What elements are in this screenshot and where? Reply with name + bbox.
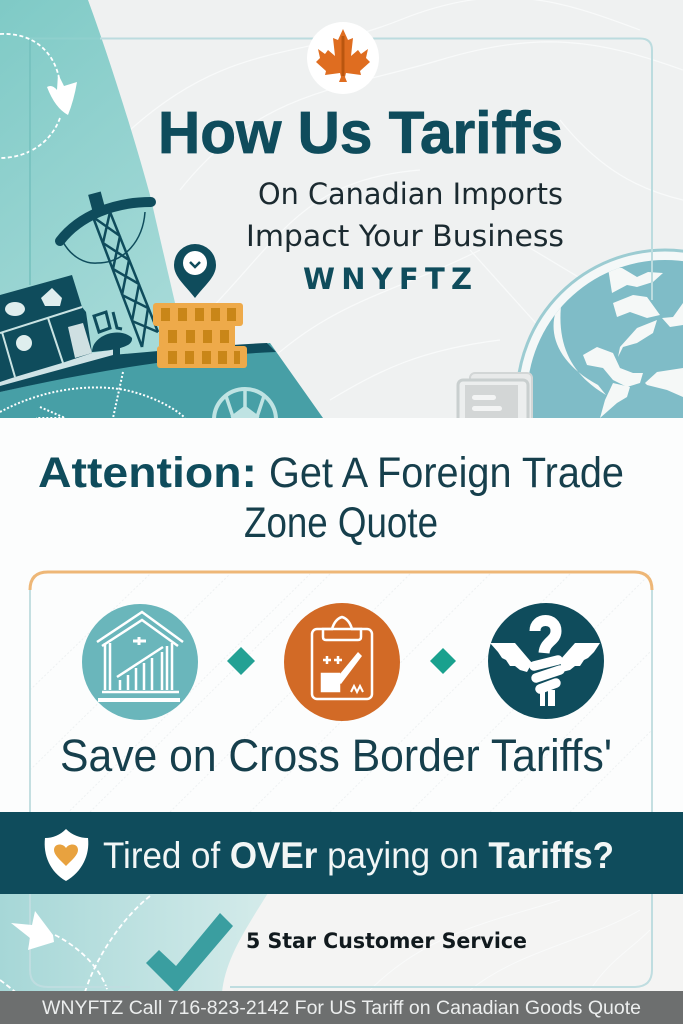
icon: white arrow <box>11 911 54 950</box>
band text: Tired of OVEr paying on Tariffs? <box>103 835 614 876</box>
dotted routes <box>0 387 185 418</box>
warehouse building <box>0 275 92 382</box>
icon: soccer-style globe <box>212 387 278 418</box>
bottom frame <box>30 893 652 987</box>
frame left edge <box>29 40 31 285</box>
icon: location pin <box>174 244 216 298</box>
bottom teal wedge <box>0 893 268 993</box>
ground light strip <box>0 349 118 386</box>
diamond <box>430 648 456 674</box>
icon: maple leaf badge <box>307 22 379 94</box>
service text: 5 Star Customer Service <box>246 929 527 953</box>
attention line 2: Zone Quote <box>244 499 438 547</box>
bottom area background <box>0 893 683 993</box>
icon: document stack <box>458 373 532 425</box>
footer text: WNYFTZ Call 716-823-2142 For US Tariff on Canadian Goods Quote <box>42 998 641 1019</box>
attention bold: Attention: <box>38 449 257 497</box>
icon: orange clipboard <box>284 603 400 721</box>
subtitle line 2: Impact Your Business <box>246 219 564 253</box>
crane tower <box>63 212 158 347</box>
dashed route loop <box>0 34 60 158</box>
tagline: Save on Cross Border Tariffs' <box>60 730 612 781</box>
attention regular: Get A Foreign Trade <box>269 449 624 497</box>
brand WNYFTZ: WNYFTZ <box>303 262 472 296</box>
header illustration: teal landscape <box>0 0 683 418</box>
ground: dark teal hill <box>0 343 323 418</box>
frame top line <box>100 38 652 300</box>
teal swoosh <box>0 0 185 400</box>
ground stripe <box>0 343 276 392</box>
dashed routes <box>0 896 150 1010</box>
icon: teal house chart <box>82 604 198 720</box>
title: How Us Tariffs <box>158 100 563 166</box>
crane arm <box>60 202 151 241</box>
icon: check mark <box>146 913 233 993</box>
forklift <box>92 333 132 352</box>
attention heading <box>38 449 624 547</box>
icon: stacked coins <box>153 303 247 368</box>
icon: shield heart <box>45 829 88 881</box>
header background <box>0 0 683 418</box>
subtitle line 1: On Canadian Imports <box>258 177 563 211</box>
icon: white arrow <box>47 74 77 115</box>
icon: dark question caduceus <box>488 603 604 719</box>
icon: globe <box>518 248 683 372</box>
panel frame <box>30 572 652 590</box>
diamond <box>227 647 255 675</box>
band <box>0 812 683 894</box>
middle panel background <box>0 418 683 812</box>
footer bar <box>0 991 683 1024</box>
